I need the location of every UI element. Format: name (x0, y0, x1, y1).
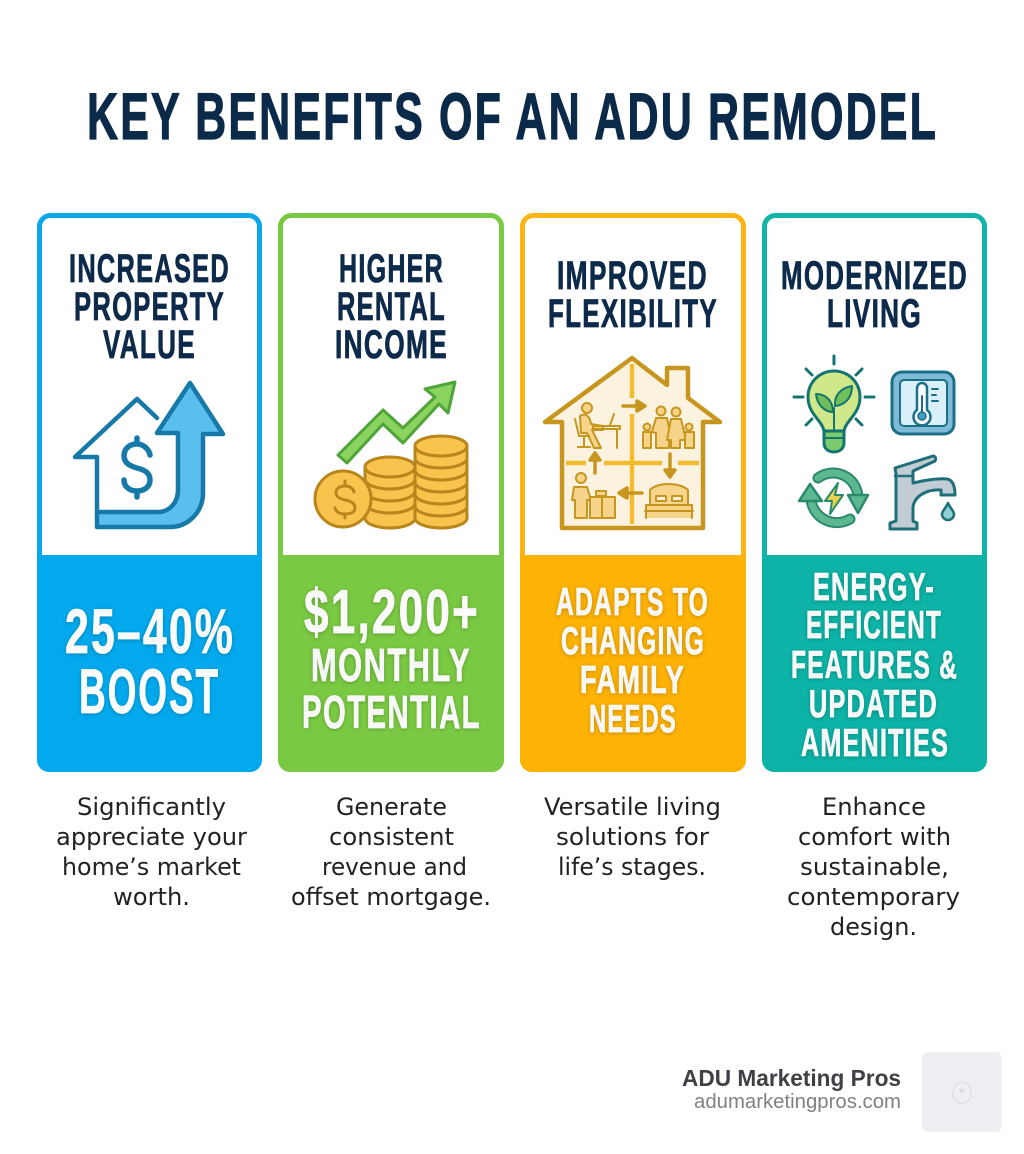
stat band (37, 555, 262, 772)
heading: FLEXIBILITY (548, 292, 718, 336)
panel: modernized living (762, 216, 987, 941)
card frame (764, 216, 984, 770)
icon: house floor plan with rooms (545, 358, 720, 528)
heading (781, 254, 968, 336)
stat band (278, 555, 504, 772)
description: Versatile living (544, 793, 721, 821)
description: Significantly (77, 793, 226, 821)
description: revenue and (322, 853, 467, 881)
description: Generate (336, 793, 447, 821)
card frame (280, 216, 502, 770)
icon: house with rising arrow and dollar (75, 383, 223, 527)
description: contemporary (787, 883, 960, 911)
panel: increased property value (37, 216, 262, 911)
heading: VALUE (103, 323, 196, 367)
heading: RENTAL (337, 285, 446, 329)
heading (69, 247, 230, 367)
heading: LIVING (827, 292, 922, 336)
stat band (520, 555, 746, 772)
stat: 25–40% (65, 597, 235, 667)
stat: POTENTIAL (302, 686, 481, 738)
stat: AMENITIES (801, 722, 949, 765)
stat: NEEDS (589, 698, 677, 741)
heading (548, 254, 718, 336)
description: worth. (113, 883, 190, 911)
stat: ADAPTS TO (556, 581, 709, 624)
description: comfort with (798, 823, 951, 851)
stat: MONTHLY (311, 639, 471, 691)
description (544, 793, 721, 881)
logo placeholder (922, 1052, 1002, 1132)
icon: efficient bulb, thermostat, energy cycle and faucet (794, 356, 955, 529)
brand name: ADU Marketing Pros (682, 1065, 901, 1091)
card frame (522, 216, 744, 770)
description: solutions for (556, 823, 709, 851)
heading: INCOME (335, 323, 448, 367)
card frame (40, 216, 260, 770)
stat band (762, 555, 987, 772)
stat: FAMILY (580, 659, 685, 702)
stat: BOOST (79, 657, 220, 727)
panel: improved flexibility (520, 216, 746, 881)
heading: IMPROVED (557, 254, 708, 298)
description: sustainable, (800, 853, 949, 881)
description: appreciate your (56, 823, 247, 851)
stat: CHANGING (561, 620, 705, 663)
description: offset mortgage. (291, 883, 491, 911)
heading: PROPERTY (74, 285, 225, 329)
description: consistent (329, 823, 454, 851)
footer brand (682, 1052, 1002, 1132)
stat: EFFICIENT (806, 604, 942, 647)
stat (302, 578, 481, 738)
description (291, 793, 491, 911)
stat (791, 566, 958, 765)
stat: $1,200+ (304, 578, 480, 647)
brand url: adumarketingpros.com (694, 1091, 901, 1113)
heading: HIGHER (339, 247, 444, 291)
stat (65, 597, 235, 727)
panel: higher rental income (278, 216, 504, 911)
description (56, 793, 247, 911)
description: design. (830, 913, 917, 941)
heading (335, 247, 448, 367)
heading: INCREASED (69, 247, 230, 291)
description: home’s market (62, 853, 241, 881)
stat: ENERGY- (813, 566, 935, 609)
description: Enhance (822, 793, 926, 821)
stat (556, 581, 709, 741)
stat: UPDATED (809, 683, 938, 726)
icon: rising arrow and coin stacks (315, 382, 467, 528)
description (787, 793, 960, 941)
description: life’s stages. (558, 853, 706, 881)
